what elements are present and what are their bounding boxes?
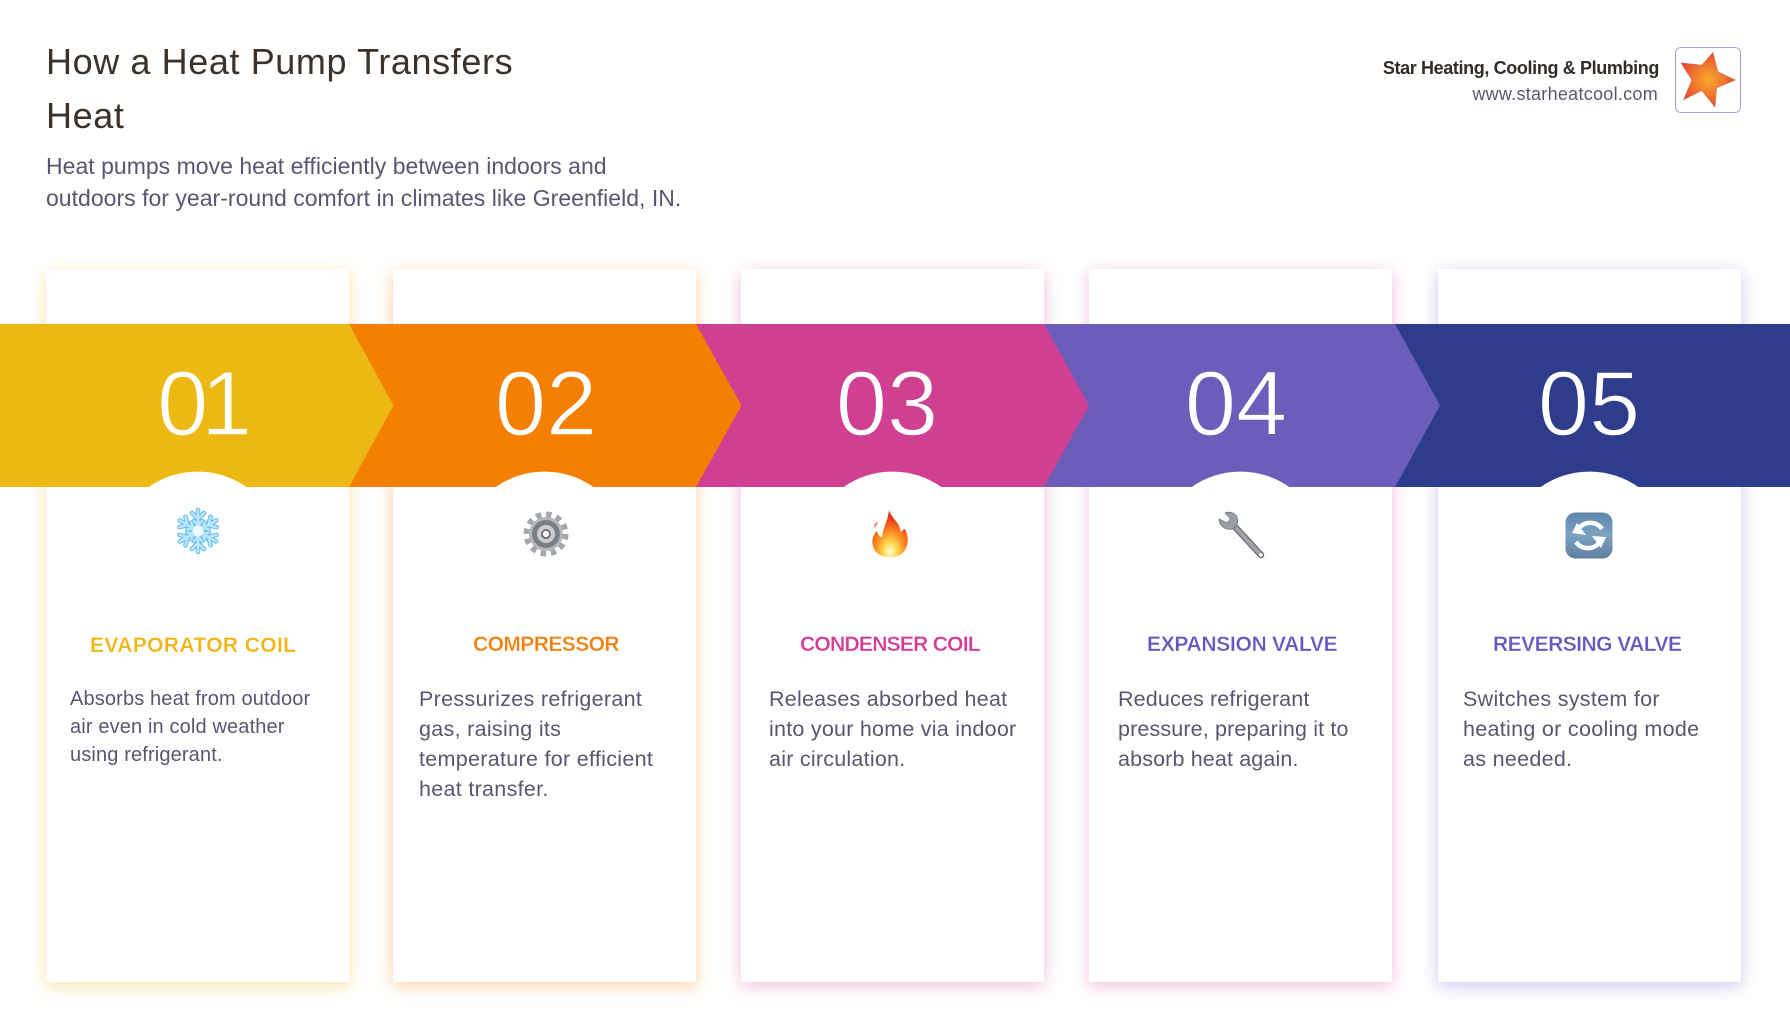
text: compressor: heat transfer.: [419, 777, 549, 801]
panel: card 5: [1438, 269, 1741, 982]
icon: wrench: [1218, 512, 1264, 558]
text: expansion valve: Reduces refrigerant: [1118, 687, 1309, 711]
title: How a Heat Pump Transfers: [46, 41, 513, 82]
text: condenser coil: [769, 687, 1016, 771]
step number 05: 05: [1538, 353, 1640, 455]
panel: card 1: [46, 269, 349, 982]
text: evaporator coil: [70, 688, 310, 766]
heading: reversing valve: REVERSING VALVE: [1493, 633, 1681, 656]
heading: evaporator coil: EVAPORATOR COIL: [90, 634, 296, 657]
panel: card 3: [741, 269, 1044, 982]
heading: compressor: COMPRESSOR: [473, 633, 619, 656]
logo: star: [1675, 47, 1741, 113]
text: expansion valve: pressure, preparing it to: [1118, 717, 1349, 741]
text: compressor: temperature for efficient: [419, 747, 653, 771]
step number 03: 03: [836, 353, 938, 455]
heading: condenser coil: CONDENSER COIL: [800, 633, 980, 656]
step number 04: 04: [1185, 353, 1287, 455]
company name: Star Heating, Cooling & Plumbing: [1383, 58, 1659, 78]
subtitle: Heat pumps move heat efficiently between indoors and: [46, 153, 607, 179]
title: [46, 41, 513, 136]
text: evaporator coil: air even in cold weather: [70, 716, 285, 738]
text: condenser coil: air circulation.: [769, 747, 905, 771]
text: compressor: gas, raising its: [419, 717, 561, 741]
subtitle: [46, 153, 681, 211]
text: evaporator coil: Absorbs heat from outdoor: [70, 688, 310, 710]
subtitle: outdoors for year-round comfort in climates like Greenfield, IN.: [46, 185, 681, 211]
icon: fire: [872, 510, 908, 557]
panel: card 4: [1089, 269, 1392, 982]
text: compressor: [419, 687, 653, 801]
step number 02: 02: [495, 353, 597, 455]
text: reversing valve: heating or cooling mode: [1463, 717, 1699, 741]
icon: gear: [524, 512, 568, 556]
text: evaporator coil: using refrigerant.: [70, 744, 223, 766]
icon: reversing arrows: [1566, 512, 1612, 558]
text: compressor: Pressurizes refrigerant: [419, 687, 642, 711]
title: Heat: [46, 95, 124, 136]
text: expansion valve: absorb heat again.: [1118, 747, 1299, 771]
text: reversing valve: Switches system for: [1463, 687, 1660, 711]
panel: card 2: [393, 269, 696, 982]
text: reversing valve: [1463, 687, 1699, 771]
text: condenser coil: Releases absorbed heat: [769, 687, 1007, 711]
text: expansion valve: [1118, 687, 1349, 771]
text: condenser coil: into your home via indoor: [769, 717, 1016, 741]
heading: expansion valve: EXPANSION VALVE: [1147, 633, 1337, 656]
website: www.starheatcool.com: [1472, 84, 1658, 104]
icon: snowflake: [177, 508, 219, 554]
step number 01: 01: [157, 353, 245, 455]
text: reversing valve: as needed.: [1463, 747, 1572, 771]
